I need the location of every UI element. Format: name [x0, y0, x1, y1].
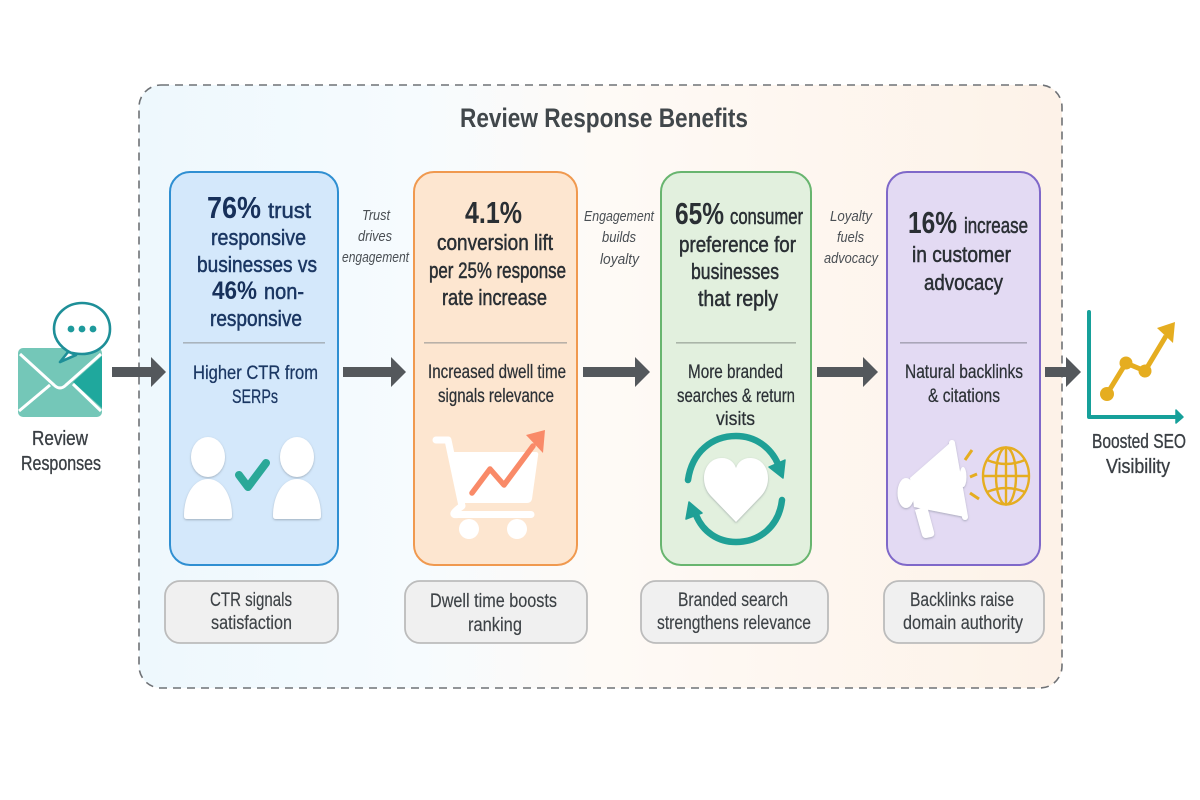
pill: backlinks raise domain authority: domain authority: [903, 613, 1023, 634]
card 1 statistic: trust: [268, 198, 311, 223]
arrow: card 4 to output: [1045, 357, 1081, 387]
icon: shopping cart with rising arrow: [436, 430, 545, 539]
card 1 statistic: [197, 190, 317, 331]
card 3 statistic: [675, 196, 803, 311]
icon: envelope with speech bubble: [18, 303, 110, 417]
card 3 benefit: [677, 362, 795, 430]
card 2 statistic: conversion lift: [437, 230, 553, 255]
connector label: engagement builds loyalty: [584, 208, 655, 268]
pill: CTR signals satisfaction: [165, 581, 338, 643]
card 3 statistic: that reply: [698, 286, 778, 311]
card 3 statistic: businesses: [691, 259, 779, 284]
input: review responses: [18, 303, 110, 475]
panel: card 3 preference: [661, 172, 811, 565]
label: review responses: [21, 428, 101, 475]
icon: heart with cycle arrows: [686, 436, 785, 542]
connector label: engagement builds loyalty: builds: [602, 229, 636, 246]
pill: dwell time boosts ranking: [405, 581, 587, 643]
icon: rising line chart: [1089, 312, 1183, 423]
card 2 statistic: per 25% response: [429, 258, 566, 283]
card 2 benefit: [428, 362, 566, 407]
arrow: card 1 to card 2: [343, 357, 406, 387]
pill: branded search strengthens relevance: strengthens relevance: [657, 613, 811, 634]
pill: backlinks raise domain authority: [884, 581, 1044, 643]
connector label: loyalty fuels advocacy: fuels: [837, 229, 864, 246]
card 1 statistic: businesses vs: [197, 252, 317, 277]
panel: card 1 trust: [170, 172, 338, 565]
connector label: trust drives engagement: engagement: [342, 249, 410, 266]
card 1 benefit: [193, 363, 318, 408]
connector label: loyalty fuels advocacy: Loyalty: [830, 208, 873, 225]
pill: branded search strengthens relevance: Branded search: [678, 590, 788, 611]
pill: branded search strengthens relevance: [641, 581, 828, 643]
card 1 statistic: 46%: [212, 277, 257, 305]
pill: backlinks raise domain authority: Backlinks raise: [910, 590, 1014, 611]
card 1 benefit: SERPs: [232, 387, 278, 408]
panel: card 4 advocacy: [887, 172, 1040, 565]
pill: dwell time boosts ranking: Dwell time boosts: [430, 591, 557, 612]
card 4 statistic: increase: [964, 213, 1028, 238]
pill: CTR signals satisfaction: CTR signals: [210, 590, 292, 611]
card 2 benefit: signals relevance: [438, 386, 554, 407]
connector label: trust drives engagement: Trust: [362, 207, 391, 224]
connector label: loyalty fuels advocacy: advocacy: [824, 250, 879, 267]
card 4 benefit: Natural backlinks: [905, 362, 1023, 383]
pill: CTR signals satisfaction: satisfaction: [211, 613, 292, 634]
card 4 statistic: in customer: [912, 242, 1011, 267]
label: review responses: Responses: [21, 453, 101, 475]
label: boosted SEO visibility: [1092, 431, 1186, 478]
card 3 statistic: consumer: [730, 204, 803, 229]
card 4 statistic: advocacy: [924, 270, 1003, 295]
icon: megaphone and globe: [898, 443, 1029, 538]
card 4 statistic: [908, 205, 1028, 295]
card 2 benefit: Increased dwell time: [428, 362, 566, 383]
connector label: trust drives engagement: drives: [358, 228, 392, 245]
panel: review response benefits container: [139, 85, 1062, 688]
card 4 benefit: [905, 362, 1023, 407]
card 3 benefit: searches & return: [677, 386, 795, 407]
card 2 statistic: rate increase: [442, 285, 547, 310]
output: boosted SEO visibility: [1089, 312, 1186, 478]
connector label: engagement builds loyalty: loyalty: [600, 251, 640, 268]
card 2 statistic: [429, 195, 566, 310]
card 1 benefit: Higher CTR from: [193, 363, 318, 384]
card 3 statistic: preference for: [679, 232, 796, 257]
card 1 statistic: responsive: [210, 306, 302, 331]
card 1 statistic: 76%: [207, 190, 261, 225]
pill: dwell time boosts ranking: ranking: [468, 615, 522, 636]
icon: two people with check: [184, 437, 321, 519]
arrow: card 2 to card 3: [583, 357, 650, 387]
connector label: engagement builds loyalty: Engagement: [584, 208, 655, 225]
panel: card 2 conversion: [414, 172, 577, 565]
label: review responses: Review: [32, 428, 88, 450]
card 4 statistic: 16%: [908, 205, 957, 240]
label: boosted SEO visibility: Visibility: [1106, 456, 1170, 478]
arrow: input to card 1: [112, 357, 166, 387]
connector label: trust drives engagement: [342, 207, 410, 266]
arrow: card 3 to card 4: [817, 357, 878, 387]
card 4 benefit: & citations: [928, 386, 1000, 407]
card 3 benefit: More branded: [688, 362, 783, 383]
connector label: loyalty fuels advocacy: [824, 208, 879, 267]
card 3 statistic: 65%: [675, 196, 724, 231]
title: Review Response Benefits: [460, 103, 748, 133]
card 2 statistic: 4.1%: [465, 195, 522, 230]
card 3 benefit: visits: [716, 409, 755, 430]
card 1 statistic: non-: [264, 279, 304, 304]
card 1 statistic: responsive: [211, 225, 306, 250]
